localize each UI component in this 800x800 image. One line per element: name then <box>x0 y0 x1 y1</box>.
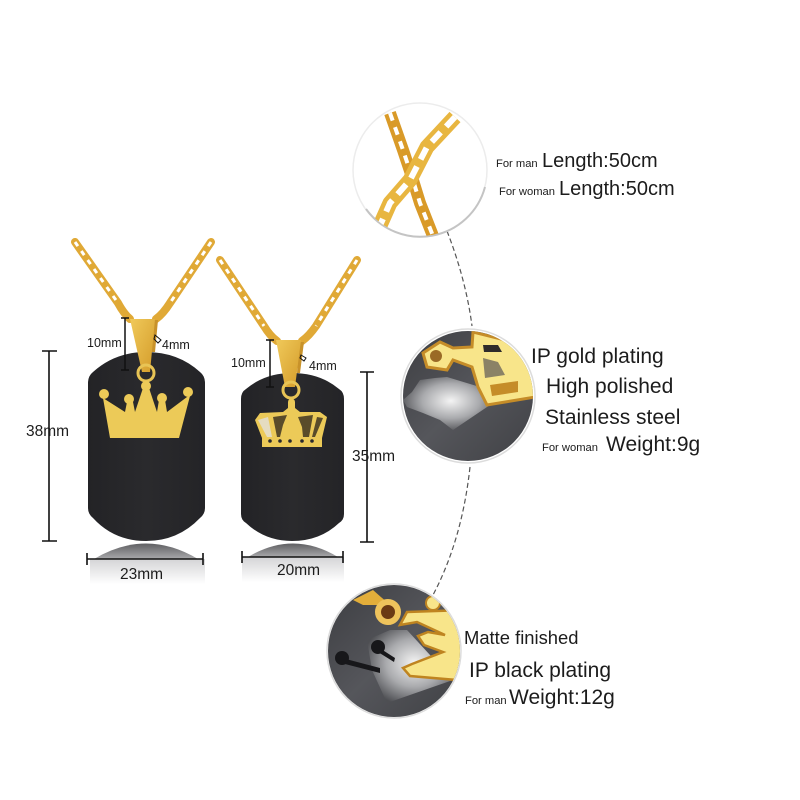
text: man's pendant specs: IP black plating <box>469 659 611 682</box>
reflection: right tag <box>242 544 344 582</box>
necklace: woman's crown tag <box>220 260 357 541</box>
text: woman's pendant specs: For woman <box>542 442 598 454</box>
polished cutout <box>403 377 490 430</box>
text: woman's pendant specs: Stainless steel <box>545 406 680 429</box>
bail <box>151 320 158 352</box>
necklace: man's crown tag <box>75 242 211 541</box>
crown <box>99 381 193 438</box>
dimension: 10mm right <box>231 340 274 387</box>
text: chain length: Length:50cm <box>559 178 675 200</box>
dimension: 35mm: 35mm <box>352 448 395 465</box>
chain <box>220 260 357 341</box>
tag plate <box>88 352 205 541</box>
dimension: 10mm left: 10mm <box>87 336 122 350</box>
text: man's pendant specs <box>464 627 615 709</box>
text: woman's pendant specs: Weight:9g <box>606 433 700 456</box>
dimension: 10mm right: 10mm <box>231 356 266 370</box>
tag plate <box>241 373 344 541</box>
bail <box>297 342 304 373</box>
detail circle: gold plating <box>400 328 536 464</box>
polished cutout <box>367 630 453 703</box>
text: woman's pendant specs <box>531 345 700 456</box>
dimension: 35mm <box>352 372 395 542</box>
gold bail <box>353 590 384 605</box>
dimension: 4mm left: 4mm <box>162 338 190 352</box>
dashed connector: middle to bottom circle <box>433 467 470 595</box>
crown <box>255 398 327 447</box>
dimension: 4mm right: 4mm <box>309 359 337 373</box>
dimension: 4mm right <box>300 355 337 373</box>
dashed connector: top to middle circle <box>447 231 472 326</box>
detail circle: chain <box>353 103 487 237</box>
text: man's pendant specs: Matte finished <box>464 627 578 648</box>
dimension: 20mm <box>242 551 343 579</box>
dimension: 38mm <box>26 351 69 541</box>
ring <box>378 602 398 622</box>
chain <box>75 242 211 319</box>
gold crown closeup <box>400 610 465 680</box>
gold crown closeup <box>423 332 535 405</box>
keyholes <box>346 650 395 673</box>
text: woman's pendant specs: High polished <box>546 375 673 398</box>
text: woman's pendant specs: IP gold plating <box>531 345 664 368</box>
dimension: 23mm <box>87 553 203 583</box>
text: chain length: For man <box>496 158 538 170</box>
text: man's pendant specs: For man <box>465 695 507 707</box>
reflection: left tag <box>90 544 205 584</box>
text: chain length <box>496 150 675 200</box>
dimension: 4mm left <box>154 335 190 352</box>
dimension: 20mm: 20mm <box>277 562 320 579</box>
dimension: 23mm: 23mm <box>120 566 163 583</box>
dimension: 38mm: 38mm <box>26 423 69 440</box>
text: man's pendant specs: Weight:12g <box>509 686 615 709</box>
dimension: 10mm left <box>87 318 129 370</box>
text: chain length: Length:50cm <box>542 150 658 172</box>
detail circle: black plating <box>326 584 465 720</box>
ring <box>283 382 299 398</box>
text: chain length: For woman <box>499 186 555 198</box>
ring <box>138 365 154 381</box>
